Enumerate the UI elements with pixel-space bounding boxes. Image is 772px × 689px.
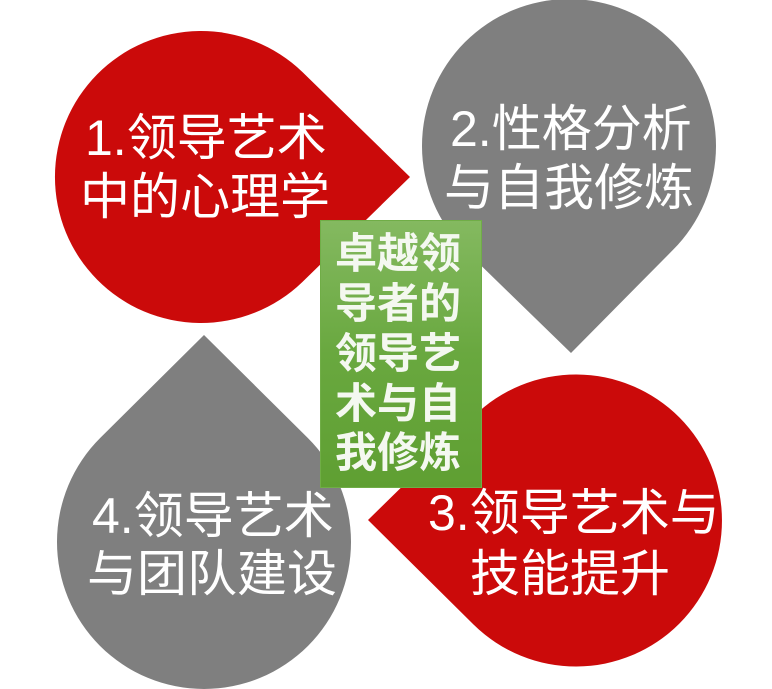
heading: 领导艺术与团队建设: 4.领导艺术 <box>92 488 334 544</box>
panel: 3 red teardrop <box>368 374 722 666</box>
heading: 领导艺术中的心理学: 1.领导艺术 <box>85 110 327 166</box>
title: 卓越领导者的领导艺术与自我修炼: 导者的 <box>335 280 461 327</box>
heading: 领导艺术与技能提升 <box>428 485 720 602</box>
title: 卓越领导者的领导艺术与自我修炼: 领导艺 <box>335 330 461 377</box>
heading: 领导艺术与团队建设: 与团队建设 <box>87 546 337 602</box>
title: 卓越领导者的领导艺术与自我修炼: 术与自 <box>335 380 461 427</box>
panel: 1 red teardrop <box>55 31 410 323</box>
heading: 性格分析与自我修炼: 2.性格分析 <box>450 101 692 157</box>
heading: 领导艺术中的心理学 <box>80 110 330 225</box>
panel: center green box <box>320 220 482 488</box>
heading: 领导艺术与技能提升: 3.领导艺术与 <box>428 485 720 541</box>
title: 卓越领导者的领导艺术与自我修炼: 卓越领 <box>335 230 461 277</box>
panel: 2 grey teardrop <box>422 0 716 353</box>
heading: 性格分析与自我修炼: 与自我修炼 <box>444 160 694 216</box>
heading: 性格分析与自我修炼 <box>444 101 694 216</box>
heading: 领导艺术与技能提升: 技能提升 <box>470 546 670 602</box>
title: 卓越领导者的领导艺术与自我修炼 <box>335 230 461 476</box>
title: 卓越领导者的领导艺术与自我修炼: 我修炼 <box>335 429 461 476</box>
heading: 领导艺术与团队建设 <box>87 488 337 602</box>
heading: 领导艺术中的心理学: 中的心理学 <box>80 169 330 225</box>
panel: 4 grey teardrop <box>57 335 351 689</box>
